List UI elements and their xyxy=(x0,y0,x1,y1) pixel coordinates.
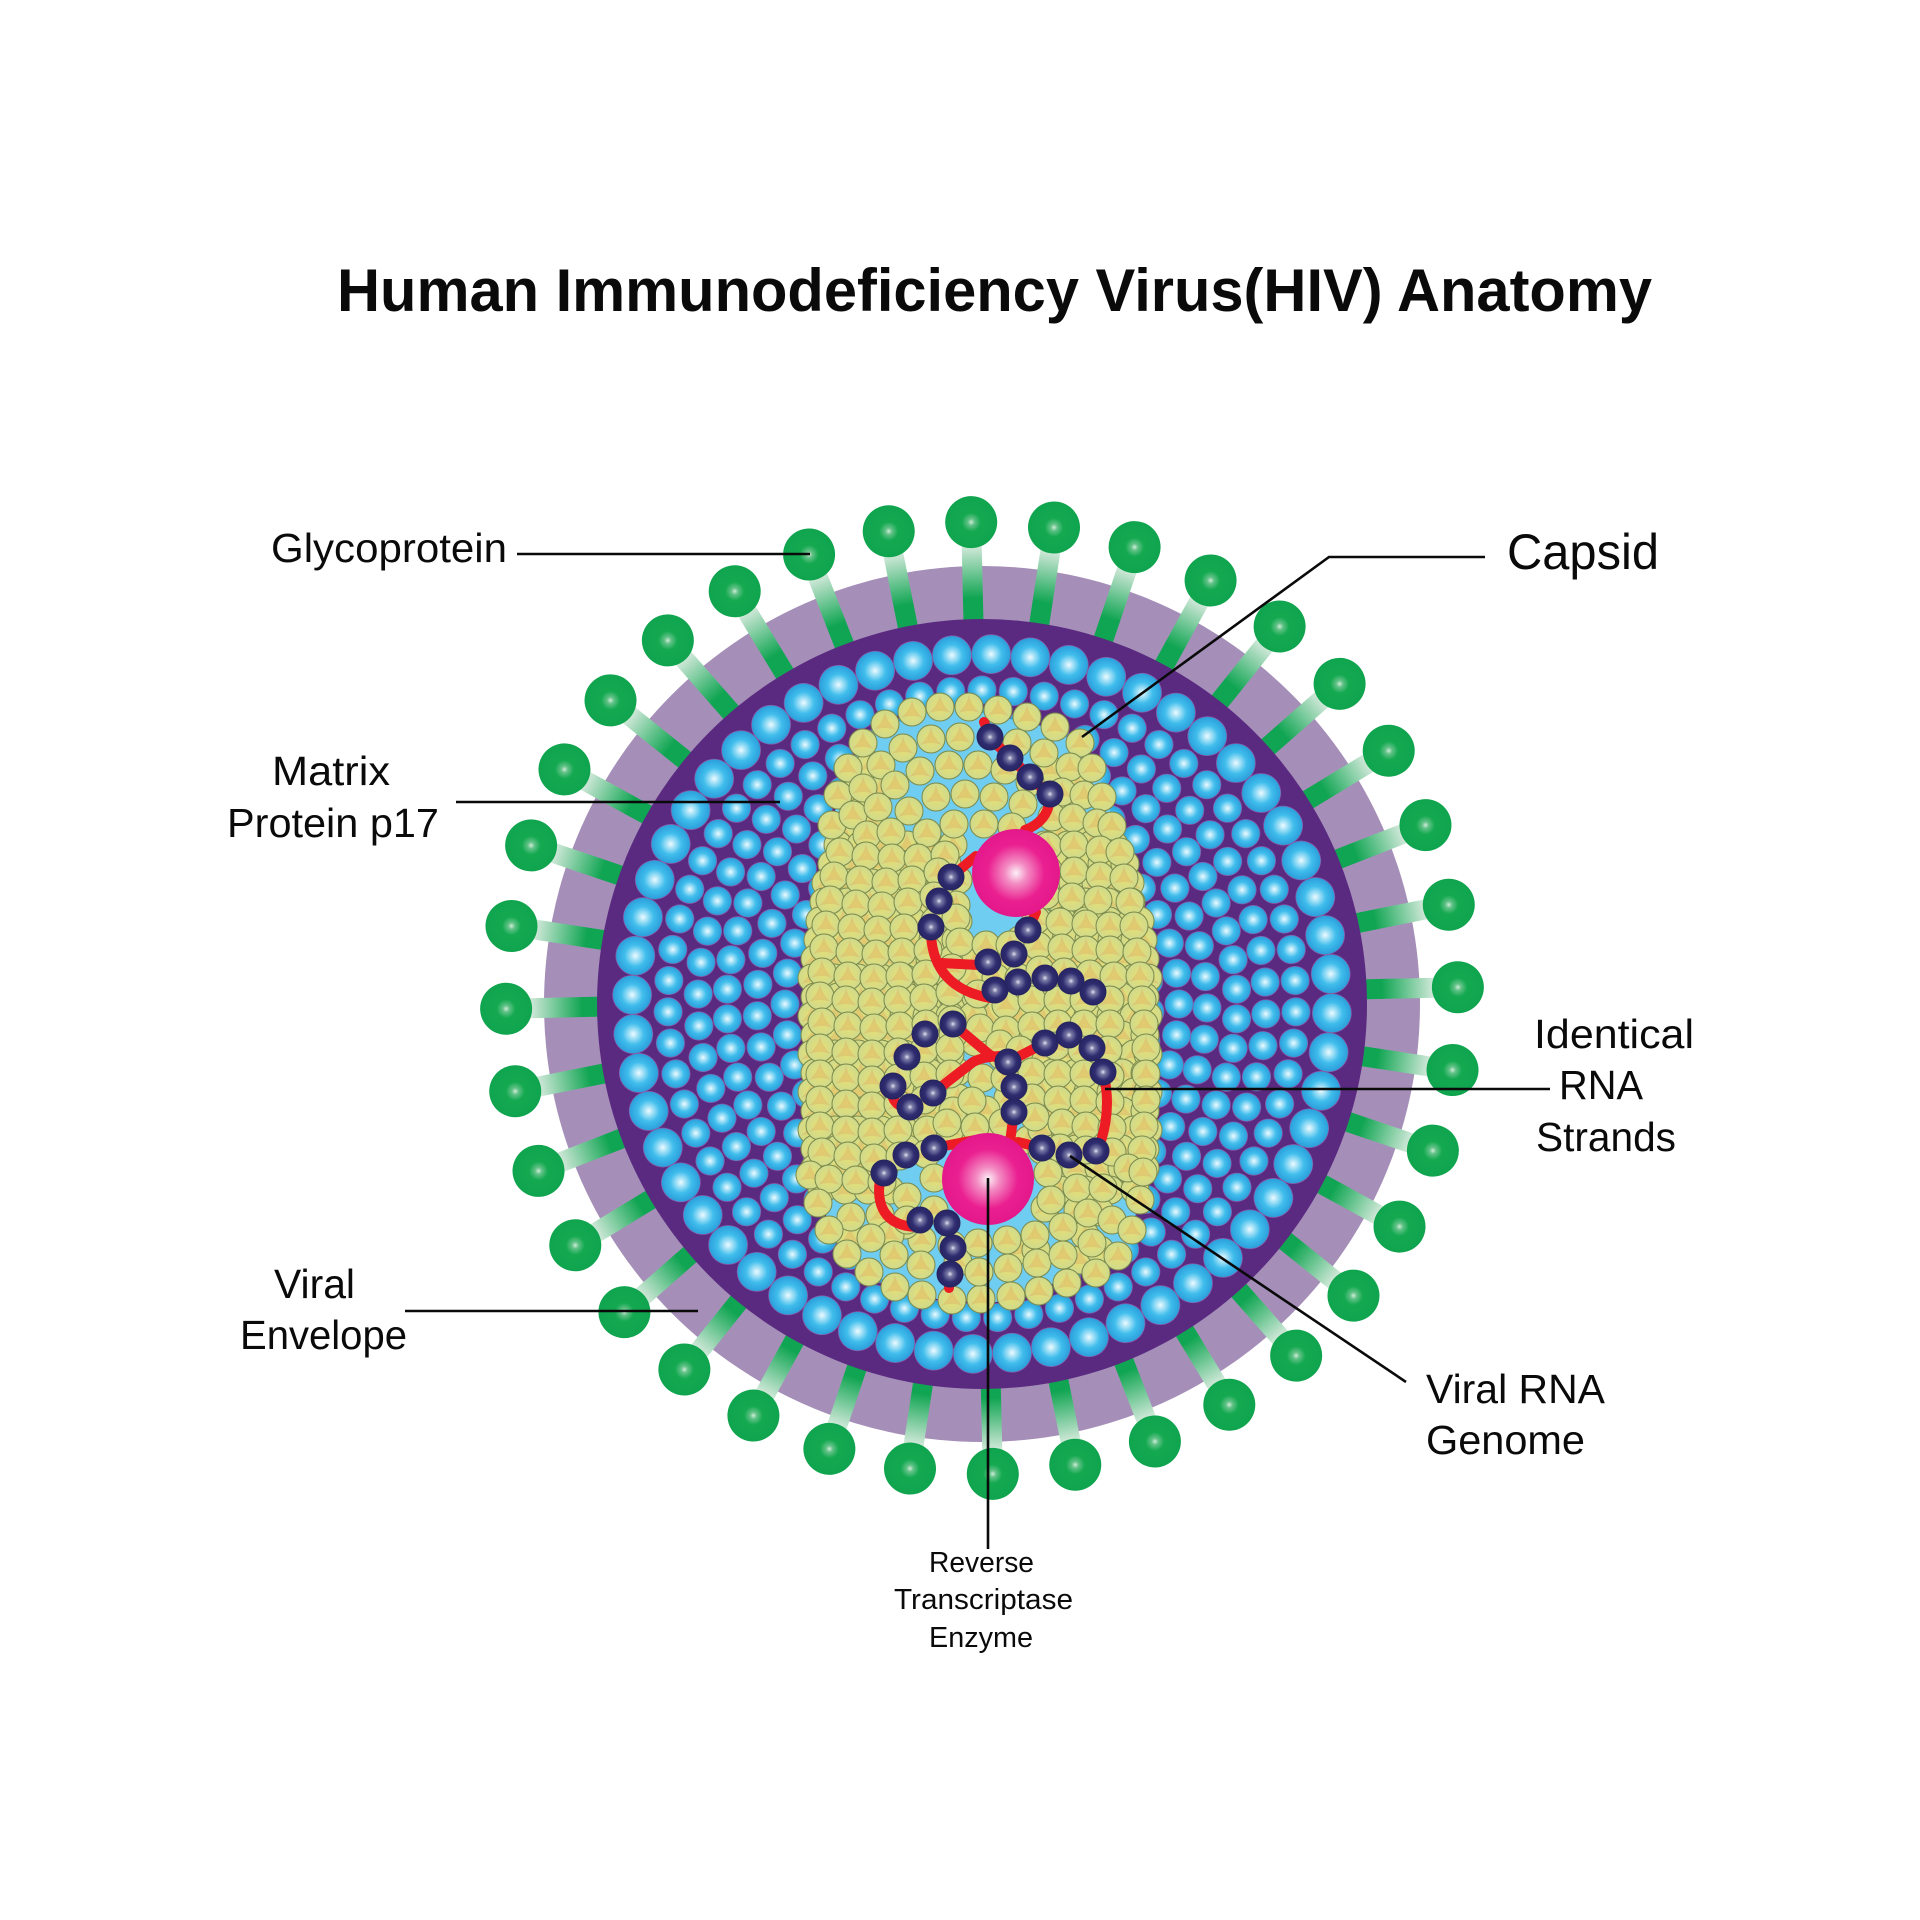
label: Viral Envelope: Viral xyxy=(274,1261,355,1307)
title: Human Immunodeficiency Virus(HIV) Anatomy xyxy=(337,257,1653,324)
label: Capsid: Capsid xyxy=(1507,524,1659,580)
label: Matrix Protein p17: Matrix xyxy=(272,748,391,794)
label: Identical RNA Strands: Identical xyxy=(1534,1011,1694,1057)
leader line: Matrix Protein p17 xyxy=(456,801,780,803)
leader line: Identical RNA Strands xyxy=(1105,1088,1550,1090)
leader line: Glycoprotein xyxy=(517,553,810,555)
label: Reverse Transcriptase Enzyme: Enzyme xyxy=(929,1622,1033,1654)
reverse transcriptase enzyme: lower xyxy=(942,1133,1034,1225)
glycoprotein spikes xyxy=(480,496,1484,1500)
reverse transcriptase enzyme: upper xyxy=(972,829,1060,917)
label: Matrix Protein p17: Protein p17 xyxy=(227,800,439,846)
leader line: Reverse Transcriptase Enzyme xyxy=(987,1178,989,1549)
label: Viral RNA Genome: Genome xyxy=(1426,1417,1585,1463)
label: Identical RNA Strands xyxy=(1534,1011,1694,1160)
viral RNA bead chains xyxy=(884,737,1103,1274)
label: Identical RNA Strands: RNA xyxy=(1559,1062,1644,1108)
capsid xyxy=(808,705,1150,1303)
leader line: Capsid xyxy=(1082,557,1485,737)
matrix protein spheres xyxy=(542,564,1422,1444)
label: Viral Envelope xyxy=(240,1261,407,1358)
viral envelope outer ring xyxy=(544,566,1420,1442)
label: Matrix Protein p17 xyxy=(227,748,439,846)
label: Reverse Transcriptase Enzyme: Reverse xyxy=(929,1547,1034,1579)
label: Viral RNA Genome: Viral RNA xyxy=(1426,1366,1606,1412)
inner membrane disc xyxy=(597,619,1367,1389)
leader line: Viral RNA Genome xyxy=(1070,1156,1406,1382)
label: Reverse Transcriptase Enzyme: Transcriptase xyxy=(894,1584,1073,1616)
label: Viral RNA Genome xyxy=(1426,1366,1606,1463)
label: Reverse Transcriptase Enzyme xyxy=(894,1547,1073,1654)
red RNA strands xyxy=(879,722,1107,1288)
label: Identical RNA Strands: Strands xyxy=(1536,1114,1676,1160)
diagram: HIV virion xyxy=(480,496,1484,1500)
leader line: Viral Envelope xyxy=(405,1310,698,1312)
label: Viral Envelope: Envelope xyxy=(240,1312,407,1358)
label: Glycoprotein: Glycoprotein xyxy=(271,525,507,571)
